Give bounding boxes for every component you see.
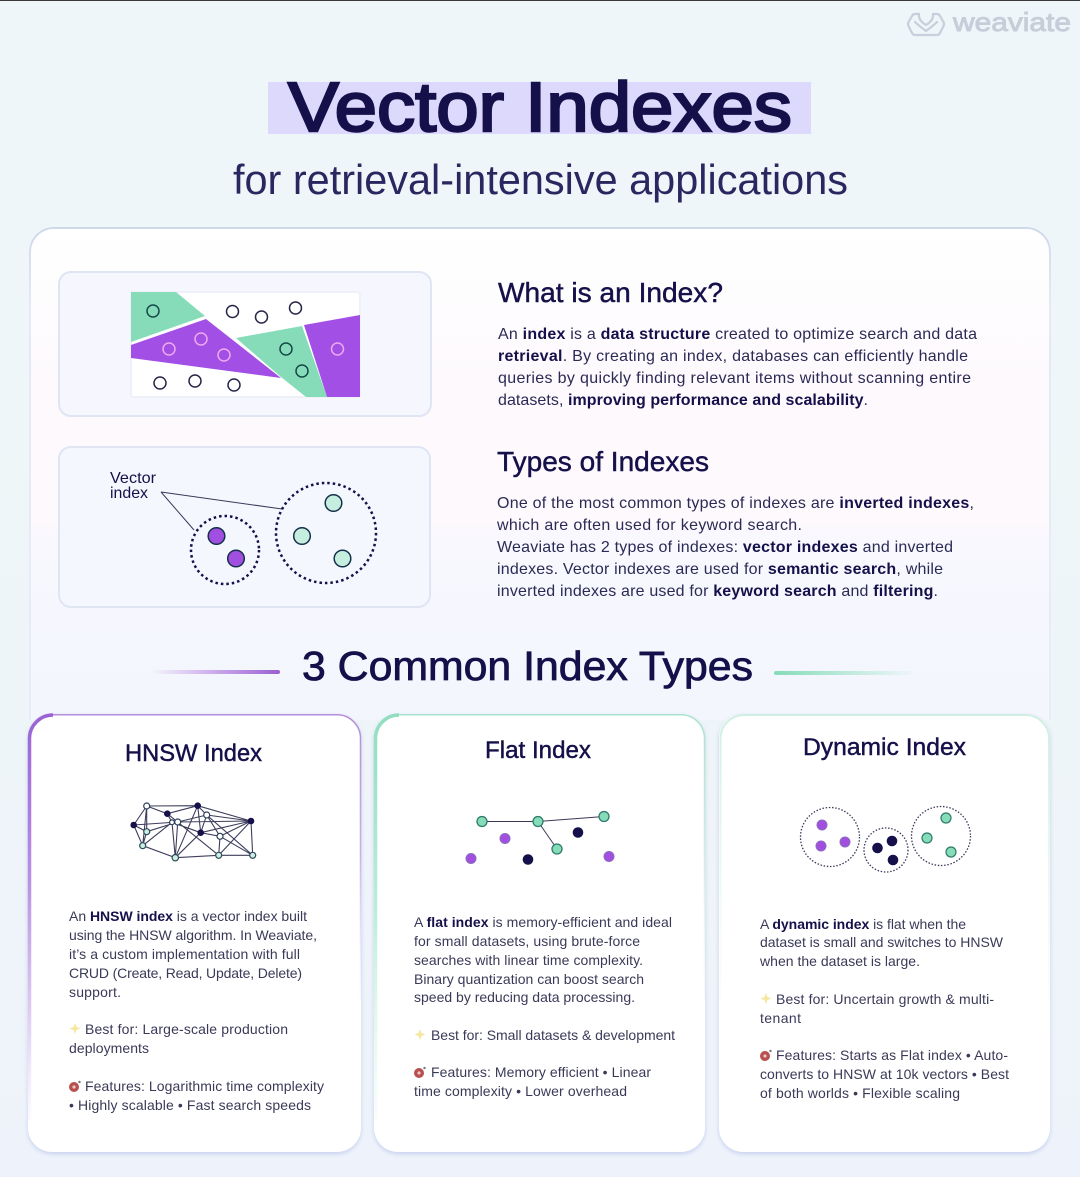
text: types of indexes: One of the most common types of indexes are inverted indexes, [497,495,974,512]
text: types of indexes: inverted indexes are used for keyword search and filtering. [497,583,938,600]
card text: searches with linear time complexity. [414,952,643,968]
card text: deployments [69,1040,149,1056]
card: dynamic index [719,714,1050,1152]
card text: • Highly scalable • Fast search speeds [69,1097,311,1113]
label: vector index: Vector [110,470,157,487]
text: what is an index: An index is a data structure created to optimize search and data [498,326,977,343]
card text: Features: Starts as Flat index • Auto- [776,1047,1008,1063]
card text [69,908,324,1113]
card text: Features: Memory efficient • Linear [431,1064,651,1080]
icon: flat graph [466,812,614,865]
card text: A flat index is memory-efficient and ideal [414,914,672,930]
icon: target [414,1067,426,1078]
heading: what is an index: What is an Index? [498,277,723,308]
card text: converts to HNSW at 10k vectors • Best [760,1066,1009,1082]
icon: HNSW graph [130,802,256,861]
text: types of indexes [496,495,974,600]
icon: target [69,1081,81,1092]
panel: diagram inverted index [59,272,431,416]
panel: diagram vector index [59,447,430,607]
card text: time complexity • Lower overhead [414,1083,627,1099]
card text: Best for: Uncertain growth & multi- [776,991,994,1007]
text: types of indexes: indexes. Vector indexes are used for semantic search, while [497,561,943,578]
card text: Binary quantization can boost search [414,971,644,987]
card text: CRUD (Create, Read, Update, Delete) [69,965,302,981]
card text: Best for: Small datasets & development [431,1027,675,1043]
card text: A dynamic index is flat when the [760,916,966,932]
card text: speed by reducing data processing. [414,989,635,1005]
card text: for small datasets, using brute-force [414,933,640,949]
icon: target [760,1050,772,1061]
icon: sparkle [70,1023,80,1034]
card heading: Flat Index [485,737,591,764]
card: flat index [374,714,705,1152]
icon: sparkle [760,993,772,1004]
label: vector index [110,470,157,502]
icon: sparkle [414,1029,426,1040]
card text: dataset is small and switches to HNSW [760,934,1004,950]
card: HNSW index [28,714,361,1152]
card text [759,916,1009,1101]
heading: types of indexes: Types of Indexes [497,446,709,477]
text: what is an index [498,326,977,409]
text: types of indexes: which are often used for keyword search. [496,517,802,534]
title: Vector Indexes [288,68,792,146]
card text: support. [69,984,121,1000]
icon: dynamic clusters [800,806,970,872]
card text: when the dataset is large. [759,953,920,969]
card text: An HNSW index is a vector index built [69,908,307,924]
card text: using the HNSW algorithm. In Weaviate, [69,927,317,943]
panel: main intro [30,228,1050,720]
card heading: HNSW Index [125,740,262,767]
card text: of both worlds • Flexible scaling [760,1085,960,1101]
text: what is an index: queries by quickly finding relevant items without scanning entire [498,370,971,387]
card text: Features: Logarithmic time complexity [85,1078,324,1094]
card text: tenant [760,1010,801,1026]
card text: it’s a custom implementation with full [69,946,300,962]
wordmark: weaviate [952,7,1071,37]
logo: weaviate [908,7,1071,37]
section heading: 3 Common Index Types [302,643,753,689]
card text: Best for: Large-scale production [85,1021,288,1037]
card text [414,914,675,1099]
text: what is an index: retrieval. By creating an index, databases can efficiently handle [498,348,968,365]
icon: weaviate mark [908,14,944,35]
text: what is an index: datasets, improving performance and scalability. [498,392,868,409]
label: vector index: index [110,485,148,502]
card heading: Dynamic Index [803,734,966,761]
section heading [150,643,919,689]
text: types of indexes: Weaviate has 2 types of indexes: vector indexes and inverted [497,539,953,556]
subtitle: for retrieval-intensive applications [233,156,848,203]
